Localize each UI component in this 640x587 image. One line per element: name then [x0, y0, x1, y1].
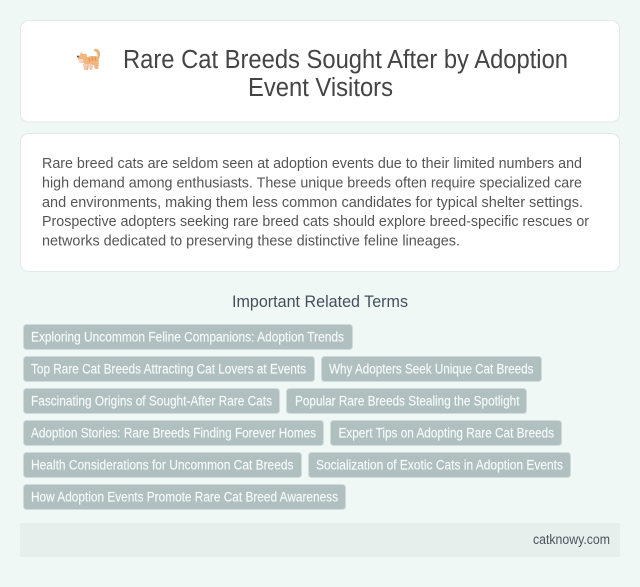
- tag: Popular Rare Breeds Stealing the Spotlight: [295, 394, 520, 408]
- tag: Exploring Uncommon Feline Companions: Adoption Trends: [31, 330, 344, 344]
- description text: Rare breed cats are seldom seen at adoption events due to their limited numbers and: [42, 155, 582, 172]
- icon: cat: [77, 49, 100, 70]
- tag: Expert Tips on Adopting Rare Cat Breeds: [338, 426, 554, 440]
- description text: high demand among enthusiasts. These unique breeds often require specialized care: [42, 174, 582, 192]
- tag: [330, 420, 562, 446]
- tag: [286, 388, 526, 414]
- footer credit: catknowy.com: [533, 532, 610, 547]
- tag: [308, 452, 570, 478]
- description text: and environments, making them less common candidates for typical shelter settings.: [42, 194, 583, 211]
- tag: Socialization of Exotic Cats in Adoption Events: [316, 458, 563, 472]
- title: Event Visitors: [248, 74, 393, 102]
- tag: Adoption Stories: Rare Breeds Finding Forever Homes: [31, 426, 316, 440]
- tag: [322, 356, 542, 382]
- title: Rare Cat Breeds Sought After by Adoption: [123, 46, 568, 74]
- heading: important related terms: Important Related Terms: [232, 293, 408, 311]
- description text: networks dedicated to preserving these distinctive feline lineages.: [42, 232, 460, 250]
- tag: [24, 420, 324, 446]
- title: [123, 46, 568, 102]
- tag: Why Adopters Seek Unique Cat Breeds: [329, 362, 534, 376]
- tag: Health Considerations for Uncommon Cat Breeds: [31, 458, 294, 472]
- tag: How Adoption Events Promote Rare Cat Breed Awareness: [31, 490, 338, 504]
- tag: [24, 484, 346, 510]
- tag list: [24, 324, 570, 510]
- description text: [42, 155, 589, 250]
- panel: title card: [20, 20, 620, 122]
- tag: [24, 452, 302, 478]
- tag: Fascinating Origins of Sought-After Rare Cats: [31, 394, 272, 408]
- tag: [24, 388, 280, 414]
- panel: description: [20, 134, 620, 272]
- footer bar: [20, 523, 620, 557]
- tag: Top Rare Cat Breeds Attracting Cat Lovers at Events: [31, 362, 306, 376]
- tag: [24, 324, 352, 350]
- tag: [24, 356, 314, 382]
- description text: Prospective adopters seeking rare breed cats should explore breed-specific rescues or: [42, 213, 589, 230]
